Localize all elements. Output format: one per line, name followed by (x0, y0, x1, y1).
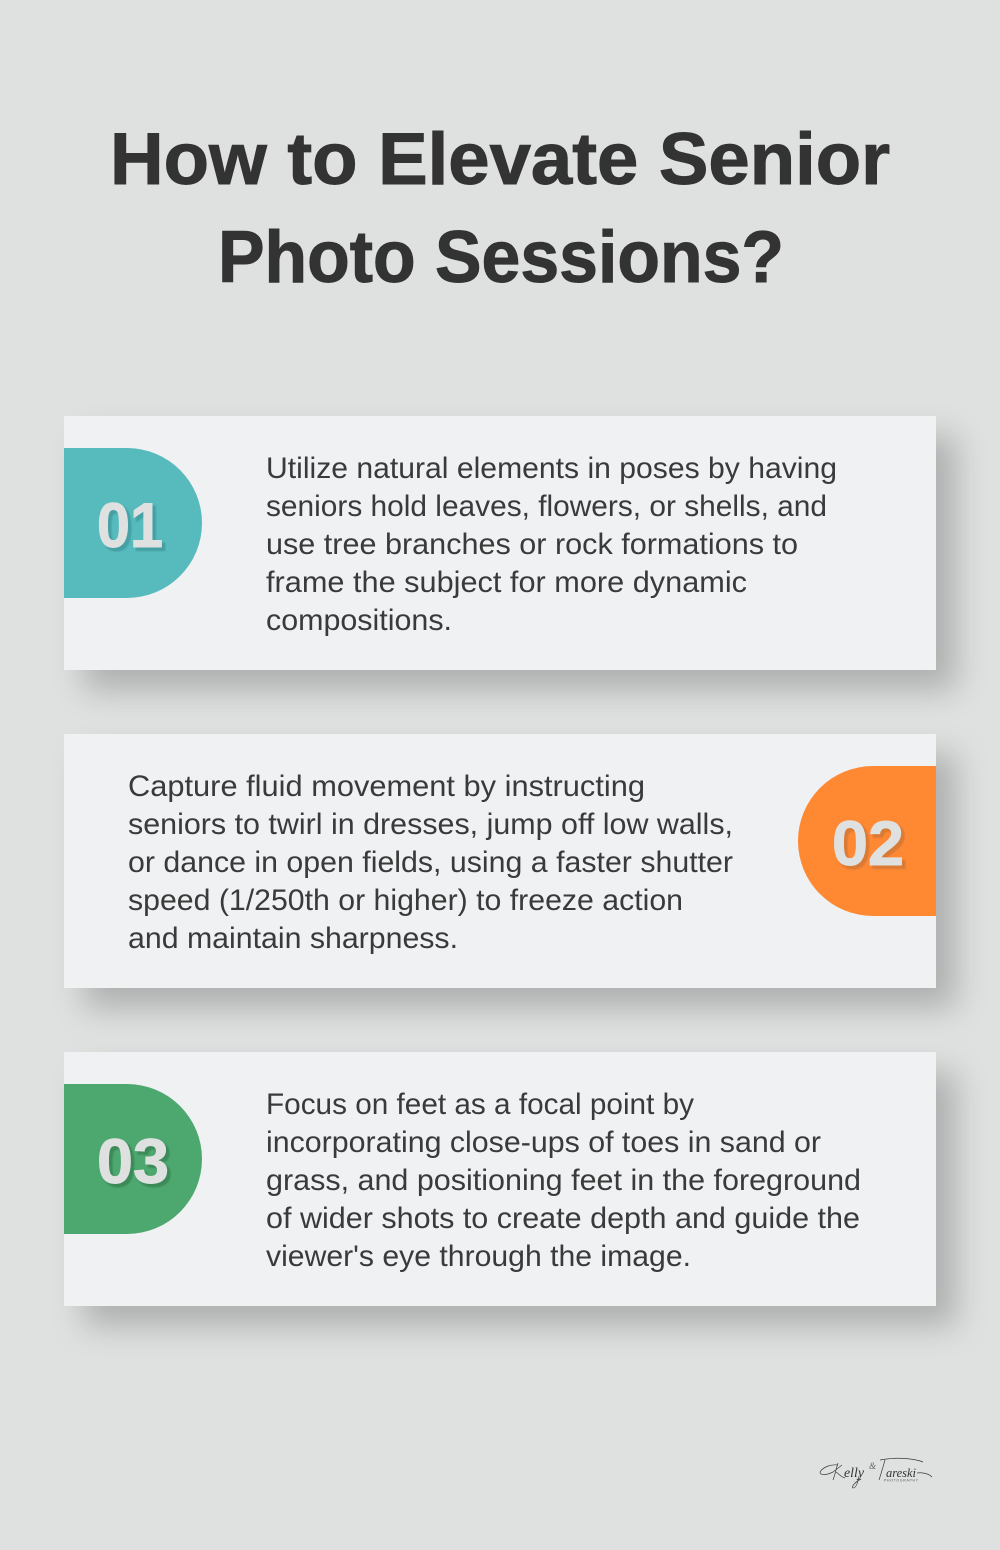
badge: 03 (64, 1084, 202, 1234)
panel: step 03 (64, 1052, 936, 1306)
text: step 01 description: frame the subject for more dynamic (266, 566, 747, 599)
logo: signature: areski (886, 1465, 916, 1480)
text: step 01 description: seniors hold leaves, flowers, or shells, and (266, 490, 827, 523)
text: step 03 description: incorporating close-ups of toes in sand or (266, 1126, 821, 1159)
badge: 01 (64, 448, 202, 598)
text: step 03 description: grass, and positioning feet in the foreground (266, 1164, 861, 1197)
title: How to Elevate Senior (110, 119, 890, 200)
text: step 01 description (266, 452, 837, 637)
title (110, 119, 890, 298)
number 03: 03 (100, 1130, 172, 1200)
text: step 02 description: seniors to twirl in dresses, jump off low walls, (128, 808, 733, 841)
text: step 03 description (266, 1088, 861, 1273)
logo: signature (820, 1458, 932, 1488)
text: step 03 description: Focus on feet as a focal point by (266, 1088, 694, 1121)
text: step 02 description (128, 770, 733, 955)
text: step 02 description: Capture fluid movement by instructing (128, 770, 645, 803)
text: step 03 description: viewer's eye through the image. (266, 1240, 691, 1273)
number 02: 02 (835, 812, 907, 882)
text: step 02 description: speed (1/250th or higher) to freeze action (128, 884, 683, 917)
number 02: 02 (832, 809, 904, 879)
panel: step 02 (64, 734, 936, 988)
panel: step 01 (64, 416, 936, 670)
number 01: 01 (97, 491, 163, 561)
badge: 02 (798, 766, 936, 916)
title: Photo Sessions? (218, 217, 784, 298)
text: step 01 description: use tree branches or rock formations to (266, 528, 798, 561)
number 03: 03 (97, 1127, 169, 1197)
number 01: 01 (100, 494, 166, 564)
text: step 01 description: compositions. (266, 604, 452, 637)
text: step 02 description: or dance in open fields, using a faster shutter (128, 846, 733, 879)
logo: signature: elly (844, 1466, 865, 1481)
logo: signature: PHOTOGRAPHY (884, 1478, 919, 1482)
text: step 03 description: of wider shots to create depth and guide the (266, 1202, 860, 1235)
logo: signature: & (869, 1461, 876, 1471)
text: step 01 description: Utilize natural elements in poses by having (266, 452, 837, 485)
text: step 02 description: and maintain sharpness. (128, 922, 458, 955)
